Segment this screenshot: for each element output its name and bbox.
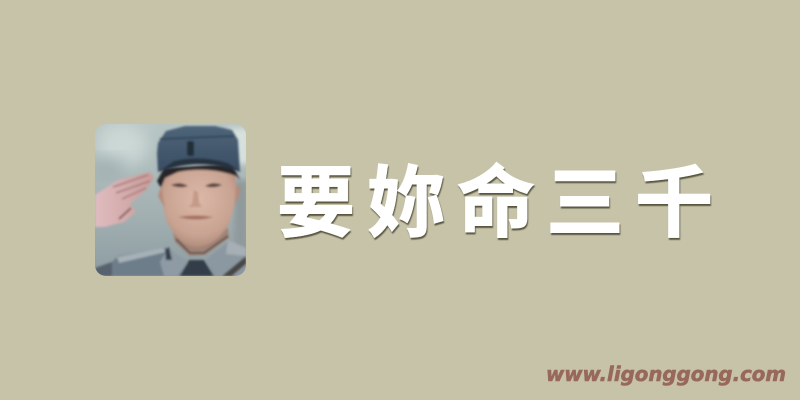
watermark url: www.ligonggong.com (546, 362, 786, 386)
uniform (95, 240, 246, 276)
hand (95, 172, 154, 227)
title: 要妳命三千 (277, 159, 713, 247)
cap (157, 126, 241, 172)
avatar: saluting soldier (95, 123, 250, 276)
face and neck (157, 164, 241, 256)
